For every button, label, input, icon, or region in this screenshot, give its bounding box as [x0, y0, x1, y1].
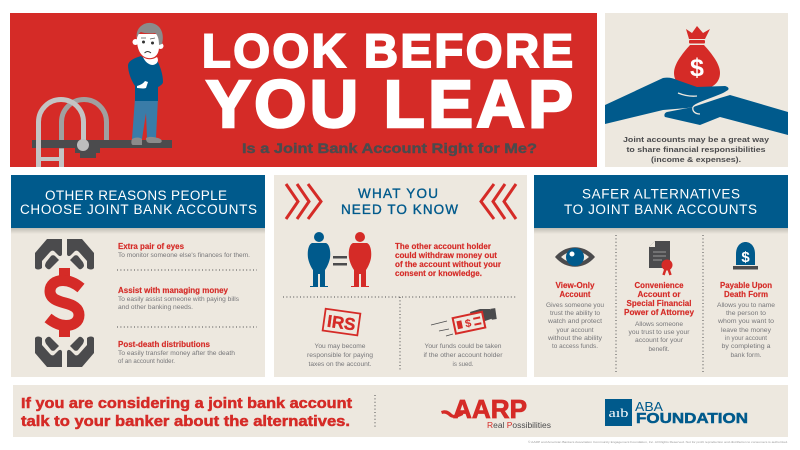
column: view-only account	[546, 247, 604, 350]
copyright: © AARP and American Bankers Association Community Engagement Foundation, Inc. All Rights Reserved. Not for profit reproduction and distribution to consumers is authorized.	[528, 440, 788, 444]
heading: what you need to know: NEED TO KNOW	[341, 202, 458, 217]
column: convenience account: Allows someone	[635, 321, 683, 328]
column: convenience account	[624, 241, 695, 353]
column: convenience account: Power of Attorney	[624, 308, 695, 317]
column: payable upon death	[717, 242, 775, 359]
column: convenience account: Special Financial	[626, 299, 692, 308]
text: withdrawal warning: could withdraw money out	[395, 251, 497, 260]
header: safer alternatives	[534, 175, 788, 228]
header: other reasons: CHOOSE JOINT BANK ACCOUNTS	[20, 202, 257, 217]
column: convenience account: account for your	[635, 337, 684, 344]
heading: what you need to know: WHAT YOU	[358, 186, 438, 201]
callout: talk to your banker: talk to your banker about the alternatives.	[21, 413, 350, 430]
heading: look before you leap: LOOK BEFORE	[202, 24, 573, 77]
text: taxes	[307, 343, 373, 368]
text: withdrawal warning: of the account without your	[395, 260, 501, 269]
icon: headstone: $	[741, 249, 750, 266]
logo: ABA Foundation	[605, 399, 748, 427]
icon: IRS stamp: IRS	[326, 312, 357, 334]
list: post-death distributions	[118, 340, 235, 365]
panel: shared responsibilities	[605, 13, 788, 167]
column: view-only account: without the ability	[547, 335, 603, 342]
text: joint accounts description	[623, 135, 770, 164]
column: view-only account: trust the ability to	[550, 310, 600, 317]
icon: diving board with ladder	[32, 100, 172, 167]
column: payable upon death: Death Form	[724, 290, 768, 299]
column: payable upon death: by completing a	[722, 343, 771, 350]
text: withdrawal warning: consent or knowledge.	[395, 269, 482, 278]
column: convenience account: Convenience	[634, 281, 684, 290]
text: funds could be taken: if the other account holder	[424, 352, 503, 359]
heading: look before you leap	[202, 24, 573, 142]
icon: IRS stamp	[323, 309, 360, 335]
header: other reasons	[11, 175, 265, 228]
text: joint accounts description: (income & expenses).	[651, 155, 741, 164]
column: view-only account: Gives someone you	[546, 302, 604, 309]
column: payable upon death: Allows you to name	[717, 302, 775, 309]
panel: safer alternatives	[534, 175, 788, 377]
text: funds could be taken: Your funds could be taken	[424, 343, 502, 350]
column: convenience account: benefit.	[648, 346, 670, 353]
logo: ABA Foundation: ABA	[635, 400, 664, 414]
header: safer alternatives: TO JOINT BANK ACCOUNTS	[564, 202, 757, 217]
panel: what you need to know	[274, 175, 527, 377]
subtitle: Is a Joint Bank Account Right for Me?	[242, 141, 537, 156]
icon: thinking man	[128, 23, 164, 145]
icon: money bag over hands	[605, 26, 788, 135]
column: payable upon death: in your account	[725, 335, 767, 342]
column: payable upon death: whom you want to	[717, 318, 774, 325]
column: convenience account: you trust to use your	[628, 329, 690, 336]
column: payable upon death: Payable Upon	[720, 281, 772, 290]
list: extra pair of eyes: To monitor someone else's finances for them.	[118, 252, 250, 259]
icon: hand taking money: $	[464, 317, 472, 330]
icon: hand taking money	[431, 308, 497, 336]
list: post-death distributions: of an account holder.	[118, 358, 175, 365]
panel: other reasons	[11, 175, 265, 377]
column: payable upon death: bank form.	[730, 352, 762, 359]
text: funds could be taken	[424, 343, 503, 368]
icon: left chevrons	[286, 184, 321, 219]
column: view-only account: watch and protect	[547, 318, 602, 325]
text: taxes: responsible for paying	[307, 352, 373, 359]
column: convenience account: Account or	[638, 290, 680, 299]
icon: two equal people	[308, 232, 371, 287]
icon: hands around dollar	[35, 239, 94, 367]
list: assist with managing money: and other banking needs.	[118, 304, 193, 311]
list: post-death distributions: Post-death distributions	[118, 340, 211, 349]
heading: look before you leap: YOU LEAP	[206, 67, 573, 142]
list: assist with managing money: To easily assist someone with paying bills	[118, 296, 240, 303]
icon: document with seal	[649, 241, 672, 275]
list: post-death distributions: To easily transfer money after the death	[118, 350, 235, 357]
icon: right chevrons	[481, 184, 516, 219]
column: view-only account: View-Only	[556, 281, 595, 290]
panel: title banner	[10, 13, 597, 167]
heading: what you need to know	[341, 186, 458, 217]
text: joint accounts description: to share financial responsibilities	[626, 145, 766, 154]
column: view-only account: your account	[556, 327, 594, 334]
list: assist with managing money	[118, 286, 240, 311]
column: payable upon death: leave the money	[721, 327, 772, 334]
logo: ABA Foundation: aıb	[608, 405, 628, 420]
logo: AARP: Real Possibilities	[487, 421, 551, 430]
header: safer alternatives: SAFER ALTERNATIVES	[582, 186, 740, 202]
callout: talk to your banker	[21, 395, 352, 430]
icon: money bag over hands: $	[690, 54, 704, 82]
callout: talk to your banker: If you are considering a joint bank account	[21, 395, 352, 412]
list: extra pair of eyes	[118, 242, 250, 259]
logo: ABA Foundation: FOUNDATION	[636, 410, 748, 427]
text: taxes: taxes on the account.	[308, 361, 372, 368]
text: joint accounts description: Joint accounts may be a great way	[623, 135, 770, 144]
text: taxes: You may become	[314, 343, 366, 350]
logo: AARP: AARP	[453, 394, 527, 424]
list: extra pair of eyes: Extra pair of eyes	[118, 242, 185, 251]
column: payable upon death: the person to	[726, 310, 766, 317]
list: assist with managing money: Assist with managing money	[118, 286, 229, 295]
panel: footer	[13, 385, 788, 437]
column: view-only account: Account	[560, 290, 591, 299]
text: withdrawal warning: The other account holder	[395, 242, 491, 251]
logo: AARP	[441, 394, 551, 430]
text: withdrawal warning	[395, 242, 501, 278]
icon: eye	[555, 247, 595, 267]
header: other reasons: OTHER REASONS PEOPLE	[45, 188, 227, 203]
column: view-only account: to access funds.	[552, 343, 598, 350]
text: funds could be taken: is sued.	[452, 361, 474, 368]
